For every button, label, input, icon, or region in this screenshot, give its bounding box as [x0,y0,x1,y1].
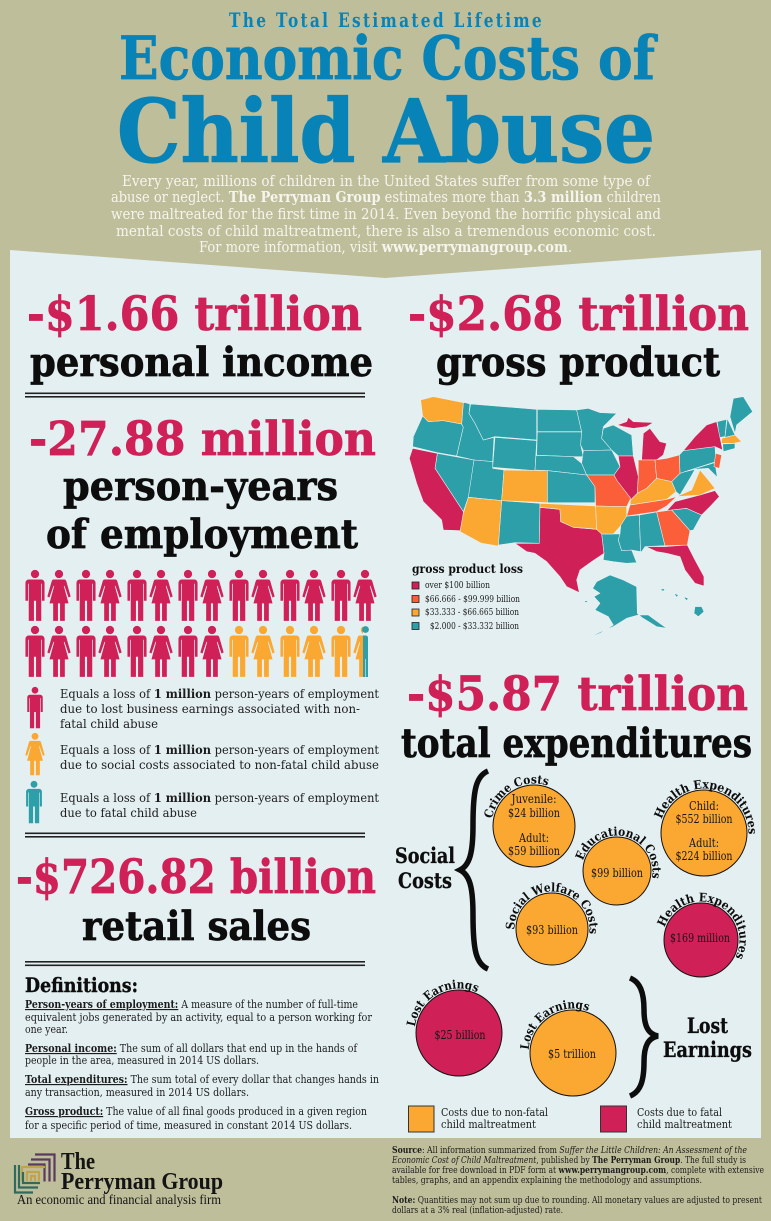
definitions: Gross product: The value of all final goods produced in a given region [25,1104,367,1118]
definitions: any transaction, measured in 2014 US dollars. [25,1085,249,1099]
circle: health expenditures non-fatal: Health Expenditures [654,780,755,834]
color key: fatal: Costs due to fatal [637,1105,722,1119]
panel: light content background with V-shaped top [10,250,761,1138]
circle: lost earnings fatal: $25 billion [434,1028,486,1042]
color key: fatal: child maltreatment [637,1117,732,1131]
circle: educational costs [575,826,661,906]
circle: health expenditures fatal: Health Expenditures [656,892,746,960]
title [117,8,659,183]
legend text: lost business earnings: due to lost business earnings associated with non- [60,701,360,716]
color key: non-fatal: Costs due to non-fatal [441,1105,548,1119]
map legend: $33.333 - $66.665 billion [425,607,519,618]
circle: lost earnings non-fatal [520,1000,616,1096]
stat: retail sales: retail sales [82,903,311,950]
circle: social welfare costs [506,882,598,966]
source and note: Economic Cost of Child Maltreatment, published by The Perryman Group. The full study is [391,1155,746,1166]
logo: The Perryman Group: Perryman Group [61,1169,223,1195]
stat: total expenditures [401,667,752,767]
legend text: lost business earnings: fatal child abuse [60,716,158,731]
title: Child Abuse [117,80,655,183]
stat: gross product [408,287,749,386]
legend text: fatal child abuse: Equals a loss of 1 million person-years of employment [60,790,379,805]
map legend [412,562,523,632]
intro paragraph: were maltreated for the first time in 2014. Even beyond the horrific physical and [111,207,661,223]
intro paragraph [111,174,661,256]
definitions: Definitions: [25,973,138,997]
circle: lost earnings fatal: Lost Earnings [406,980,479,1026]
circle: health expenditures non-fatal: $552 billion [676,812,733,826]
title: Economic Costs of [119,24,659,94]
label: lost earnings: Lost [687,1013,728,1038]
map legend: gross product loss [412,562,523,576]
intro paragraph: mental costs of child maltreatment, there is also a tremendous economic cost. [116,224,656,240]
definitions: for a specific period of time, measured in constant 2014 US dollars. [25,1118,352,1132]
map legend: $66.666 - $99.999 billion [425,594,520,605]
stat: retail sales [16,832,376,966]
intro paragraph: Every year, millions of children in the United States suffer from some type of [122,174,652,190]
color key: fatal [600,1105,732,1132]
circle: crime costs: Crime Costs [484,776,548,818]
label: social costs [395,843,455,893]
circle: health expenditures non-fatal [654,780,755,876]
title: The Total Estimated Lifetime [229,8,544,32]
stat: person-years of employment [29,412,376,558]
definitions [25,973,379,1132]
stat: personal income: -$1.66 trillion [27,287,362,342]
logo: The Perryman Group: The [61,1149,95,1175]
definitions: one year. [25,1022,68,1036]
circle: crime costs [484,776,576,868]
definitions: Personal income: The sum of all dollars that end up in the hands of [25,1041,358,1055]
pictogram row 1 [25,570,377,621]
circle: social welfare costs: Social Welfare Costs [506,882,598,934]
intro paragraph: For more information, visit www.perrymangroup.com. [199,239,572,256]
label: social costs: Social [395,843,455,868]
legend text: social costs [60,742,379,772]
brace: social costs [460,771,488,969]
intro paragraph: abuse or neglect. The Perryman Group estimates more than 3.3 million children [111,189,661,206]
source and note [391,1145,764,1216]
stat: total expenditures: -$5.87 trillion [407,667,748,722]
circle: lost earnings non-fatal: Lost Earnings [520,1000,590,1050]
circle: educational costs: $99 billion [591,866,643,880]
legend text: social costs: due to social costs associated to non-fatal child abuse [60,757,379,772]
circle: lost earnings non-fatal: $5 trillion [548,1047,596,1061]
color key: non-fatal: child maltreatment [441,1117,536,1131]
circle: crime costs: Juvenile: [510,792,556,806]
map legend: over $100 billion [425,580,490,591]
definitions: people in the area, measured in 2014 US dollars. [25,1053,259,1067]
circle: crime costs: $59 billion [508,844,560,858]
brace: lost earnings [630,978,658,1096]
icon: teal person [26,781,42,823]
legend text: fatal child abuse [60,790,379,820]
logo: The Perryman Group: An economic and financial analysis firm [17,1193,221,1208]
circle: health expenditures non-fatal: Adult: [688,836,719,850]
label: social costs: Costs [398,868,452,893]
definitions: Total expenditures: The sum total of every dollar that changes hands in [25,1072,379,1086]
legend text: lost business earnings: Equals a loss of 1 million person-years of employment [60,686,379,701]
color key: non-fatal [408,1105,548,1132]
definitions: equivalent jobs generated by an activity, equal to a person working for [25,1010,372,1024]
circle: health expenditures non-fatal: $224 billion [676,849,733,863]
icon: crimson person [27,687,43,728]
circle: health expenditures fatal: $169 million [670,931,730,945]
legend text: fatal child abuse: due to fatal child abuse [60,805,197,820]
map: gross product loss by state [409,397,753,638]
source and note: dollars at a 3% real (inflation-adjusted) rate. [392,1205,563,1216]
logo: The Perryman Group [15,1149,223,1208]
circle: lost earnings fatal [406,980,502,1076]
stat: person-years of employment: of employment [46,511,358,558]
stat: personal income: personal income [30,339,373,386]
source and note: tables, graphs, and an appendix explaining the methodology and assumptions. [392,1175,702,1186]
stat: retail sales: -$726.82 billion [16,850,376,905]
stat: gross product: gross product [436,339,720,386]
legend text: social costs: Equals a loss of 1 million person-years of employment [60,742,379,757]
stat: person-years of employment: person-years [63,463,338,510]
label: lost earnings: Earnings [663,1037,752,1062]
map legend: $2.000 - $33.332 billion [430,621,519,632]
stat: person-years of employment: -27.88 million [29,412,376,467]
circle: health expenditures non-fatal: Child: [689,799,719,813]
pictogram row 2 [25,626,377,677]
stat: personal income [25,287,373,398]
definitions: Person-years of employment: A measure of the number of full-time [25,997,358,1011]
circle: crime costs: Adult: [518,831,549,845]
icon: orange person [25,733,45,775]
label: lost earnings [663,1013,752,1062]
circle: social welfare costs: $93 billion [526,923,578,937]
legend text: lost business earnings [60,686,379,731]
circle: educational costs: Educational Costs [575,826,661,878]
circle: crime costs: $24 billion [508,806,560,820]
stat: gross product: -$2.68 trillion [408,287,749,342]
